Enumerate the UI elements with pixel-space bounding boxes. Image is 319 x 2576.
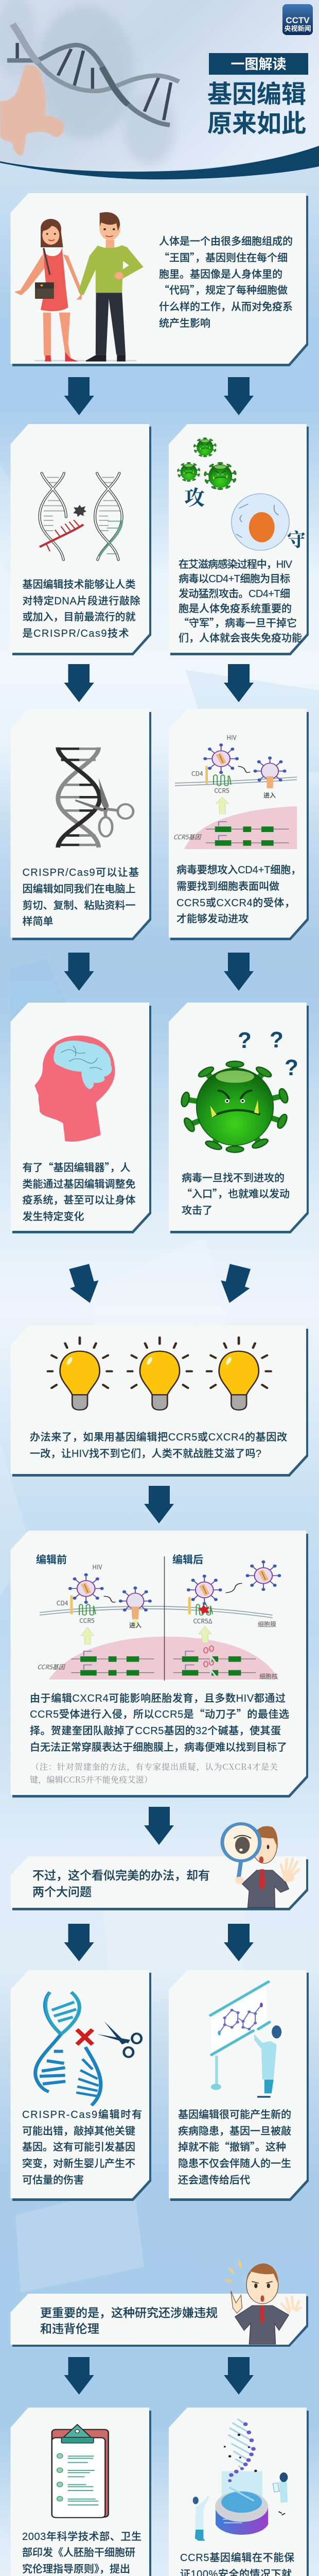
divider and labels [36,1551,278,1681]
divider and labels: 编辑后 [172,1551,203,1566]
divider and labels: 进入 [129,1621,141,1630]
text: CCR5受体进行入侵，所以CCR5是“动刀子”的最佳选 [30,1706,289,1721]
characters: attack and defend: 攻 [184,482,205,511]
text: 对特定DNA片段进行敲除 [23,595,140,607]
title: 基因编辑 [207,74,306,110]
diagram: CCR5 before and after [40,1561,281,1680]
hand [0,65,64,156]
text: 更重要的是，这种研究还涉嫌违规 [40,2306,218,2319]
text: 不过，这个看似完美的办法，却有 [32,1869,210,1882]
note: 键，编辑CCR5并不能免疫艾滋） [30,1773,152,1785]
panel: ethics guidelines [10,2408,151,2576]
title [207,53,308,139]
text: 白无法正常穿膜表达于细胞膜上，病毒便难以找到目标了 [30,1741,287,1753]
text [22,2531,141,2576]
text: 基因编辑很可能产生新的 [178,2109,291,2121]
illustration: scientist at board [210,1982,281,2098]
text: 病毒一旦找不到进攻的 [182,1172,285,1184]
text [180,2552,294,2576]
text: 一改，让HIV找不到它们，人类不就战胜艾滋了吗? [30,1448,261,1460]
illustration: DNA strands being edited [40,473,122,560]
header: photo background with curved band [0,0,319,179]
text: 基因。这有可能引发基因 [22,2141,135,2153]
text [23,579,140,639]
text [23,1159,136,1223]
arrow: to two problems [144,1807,174,1845]
intro text: 胞里。基因像是人身体里的 [159,268,282,280]
diagram: HIV entry via CCR5 [175,743,297,849]
illustration: hand holding DNA [0,24,179,156]
panel: editing errors [10,1970,151,2201]
text [179,558,302,644]
text: 2003年科学技术部、卫生 [22,2531,141,2543]
text [176,864,301,925]
divider and labels: 细胞膜 [258,1620,276,1629]
panel: CCR5 receptor [169,709,309,940]
text: 才能够发动进攻 [176,913,249,925]
illustration: head with brain [34,1036,115,1142]
arrows: to ethics detail [64,2357,254,2395]
arrows: to two problems detail [64,1924,254,1961]
text: 因编辑如同我们在电脑上 [23,883,136,895]
text: CRISPR/Cas9可以让基 [23,867,139,878]
text [30,1431,287,1460]
illustration: confused virus [180,1061,289,1153]
text: 由于编辑CXCR4可能影响胚胎发育，且多数HIV都通过 [30,1692,286,1704]
text: 类能通过基因编辑调整免 [23,1178,136,1190]
text [40,2306,218,2335]
text: 样简单 [23,916,54,927]
panel: two big problems [10,1824,308,1910]
text: 隐患不仅会伴随人的一生 [178,2158,291,2170]
panel: gene editor [10,1003,151,1233]
note: （注：针对贺建奎的方法，有专家提出质疑，认为CXCR4才是关 [31,1760,278,1772]
labels: CCR5基因 [173,833,202,841]
illustration: man pointing up [224,2260,300,2344]
text: 发动猛烈攻击。CD4+T细 [179,588,290,600]
panel: new disease risk [169,1970,309,2201]
text: 胞是人体免疫系统重要的 [179,603,292,615]
text: 突变，对新生婴儿产生不 [22,2158,135,2170]
intro text: 统产生影响 [159,317,210,329]
text [23,867,139,927]
text: 需要找到细胞表面叫做 [176,880,279,892]
text: 可能出错，敲掉其他关键 [22,2125,135,2137]
text: CCR5基因编辑在不能保 [180,2552,294,2564]
text: “守军”，病毒一旦干掉它 [179,615,297,630]
text: 两个大问题 [32,1885,92,1899]
text: 择。贺建奎团队敲掉了CCR5基因的32个碱基，使其蛋 [30,1725,281,1737]
DNA helix [7,24,179,125]
text: 是CRISPR/Cas9技术 [23,628,129,639]
intro text: 人体是一个由很多细胞组成的 [159,235,293,247]
title: 原来如此 [207,103,306,139]
labels: CD4 [191,769,203,778]
text: CCR5或CXCR4的受体， [176,897,295,909]
text: 有了“基因编辑器”，人 [23,1159,131,1174]
panel: respect for people [169,2408,309,2576]
panel: intro [10,193,308,366]
text: 基因编辑技术能够让人类 [23,579,136,590]
text: 掉就不能“撤销”。这种 [178,2139,286,2154]
text: 疾病隐患，基因一旦被敲 [178,2125,291,2137]
arrows: row 2 to row 3 [64,664,254,702]
text: 还会遗传给后代 [178,2174,250,2186]
question marks: ? [270,1027,283,1053]
divider and labels: CCR5Δ [193,1617,212,1625]
text: 或加入，目前最流行的就 [23,611,136,623]
text [22,2109,142,2186]
text [178,2109,291,2186]
labels: HIV [226,733,237,742]
text: 病毒以CD4+T细胞为目标 [179,573,290,585]
arrows: row 3 to row 4 [64,953,254,991]
logo: CCTV news: 央视新闻 [284,23,311,33]
text: 究伦理指导原则》，提出 [22,2563,130,2575]
text [32,1869,210,1899]
illustration: viruses and cell [177,437,289,550]
text: 和违背伦理 [40,2322,99,2335]
note [30,1760,278,1785]
text: “入口”，也就难以发动 [182,1185,290,1200]
intro text: “代码”，规定了每种细胞做 [159,282,288,297]
text: 剪切、复制、粘贴资料一 [23,900,136,911]
illustration: DNA on platform with scientists [193,2419,288,2541]
text: 部印发《人胚胎干细胞研 [22,2547,135,2558]
logo: CCTV news [282,4,313,35]
arrows: converging to bulbs [69,1264,251,1303]
illustration: couple [14,212,144,362]
text: 病毒要想攻入CD4+T细胞， [176,864,301,876]
characters: attack and defend: 守 [287,526,306,552]
intro text: “王国”，基因则住在每个细 [159,249,288,264]
text: 可估量的伤害 [22,2174,84,2186]
intro text [159,235,293,329]
icon: clipboard [52,2425,109,2518]
question marks: ? [238,1028,252,1053]
text: 办法来了，如果用基因编辑把CCR5或CXCR4的基因改 [30,1431,287,1443]
title: 一图解读 [231,53,286,73]
panel: idea with light bulbs [10,1326,308,1477]
text [30,1692,289,1753]
divider and labels: 编辑前 [36,1551,67,1566]
icon: three light bulbs [48,1337,271,1410]
labels [173,733,276,841]
panel: gene editing technology [10,424,151,655]
panel: CRISPR/Cas9 [10,709,151,940]
divider and labels: CCR5基因 [37,1663,66,1671]
arrows: intro to row 2 [64,377,254,415]
text: 攻击了 [182,1205,212,1216]
intro text: 什么样的工作，从而对免疫系 [159,301,293,313]
labels: 进入 [263,791,276,800]
illustration: DNA and scissors [58,748,133,848]
divider and labels: 细胞核 [259,1672,278,1681]
divider and labels: CD4 [57,1599,68,1607]
arrow: to comparison [144,1486,174,1523]
question marks [238,1027,298,1080]
text: 在艾滋病感染过程中，HIV [179,558,293,570]
characters: attack and defend [184,482,306,552]
panel: HIV attack [169,424,309,655]
panel: ethics [10,2260,308,2347]
text: CRISPR-Cas9编辑时有 [22,2109,142,2121]
illustration: man with magnifying glass [222,1824,299,1908]
logo: CCTV news: CCTV [286,15,310,25]
panel: before and after editing [10,1531,308,1798]
text [182,1172,290,1216]
text: 发生特定变化 [23,1211,84,1223]
illustration: blue DNA with scissors [36,1992,141,2106]
divider and labels: CCR5 [79,1616,95,1625]
labels: CCR5 [214,786,229,795]
question marks: ? [285,1055,298,1080]
text: 疫系统，甚至可以让身体 [23,1194,136,1206]
text: 们，人体就会丧失免疫功能 [179,632,302,644]
divider and labels: HIV [92,1563,102,1571]
panel: virus without entry [169,1003,309,1233]
